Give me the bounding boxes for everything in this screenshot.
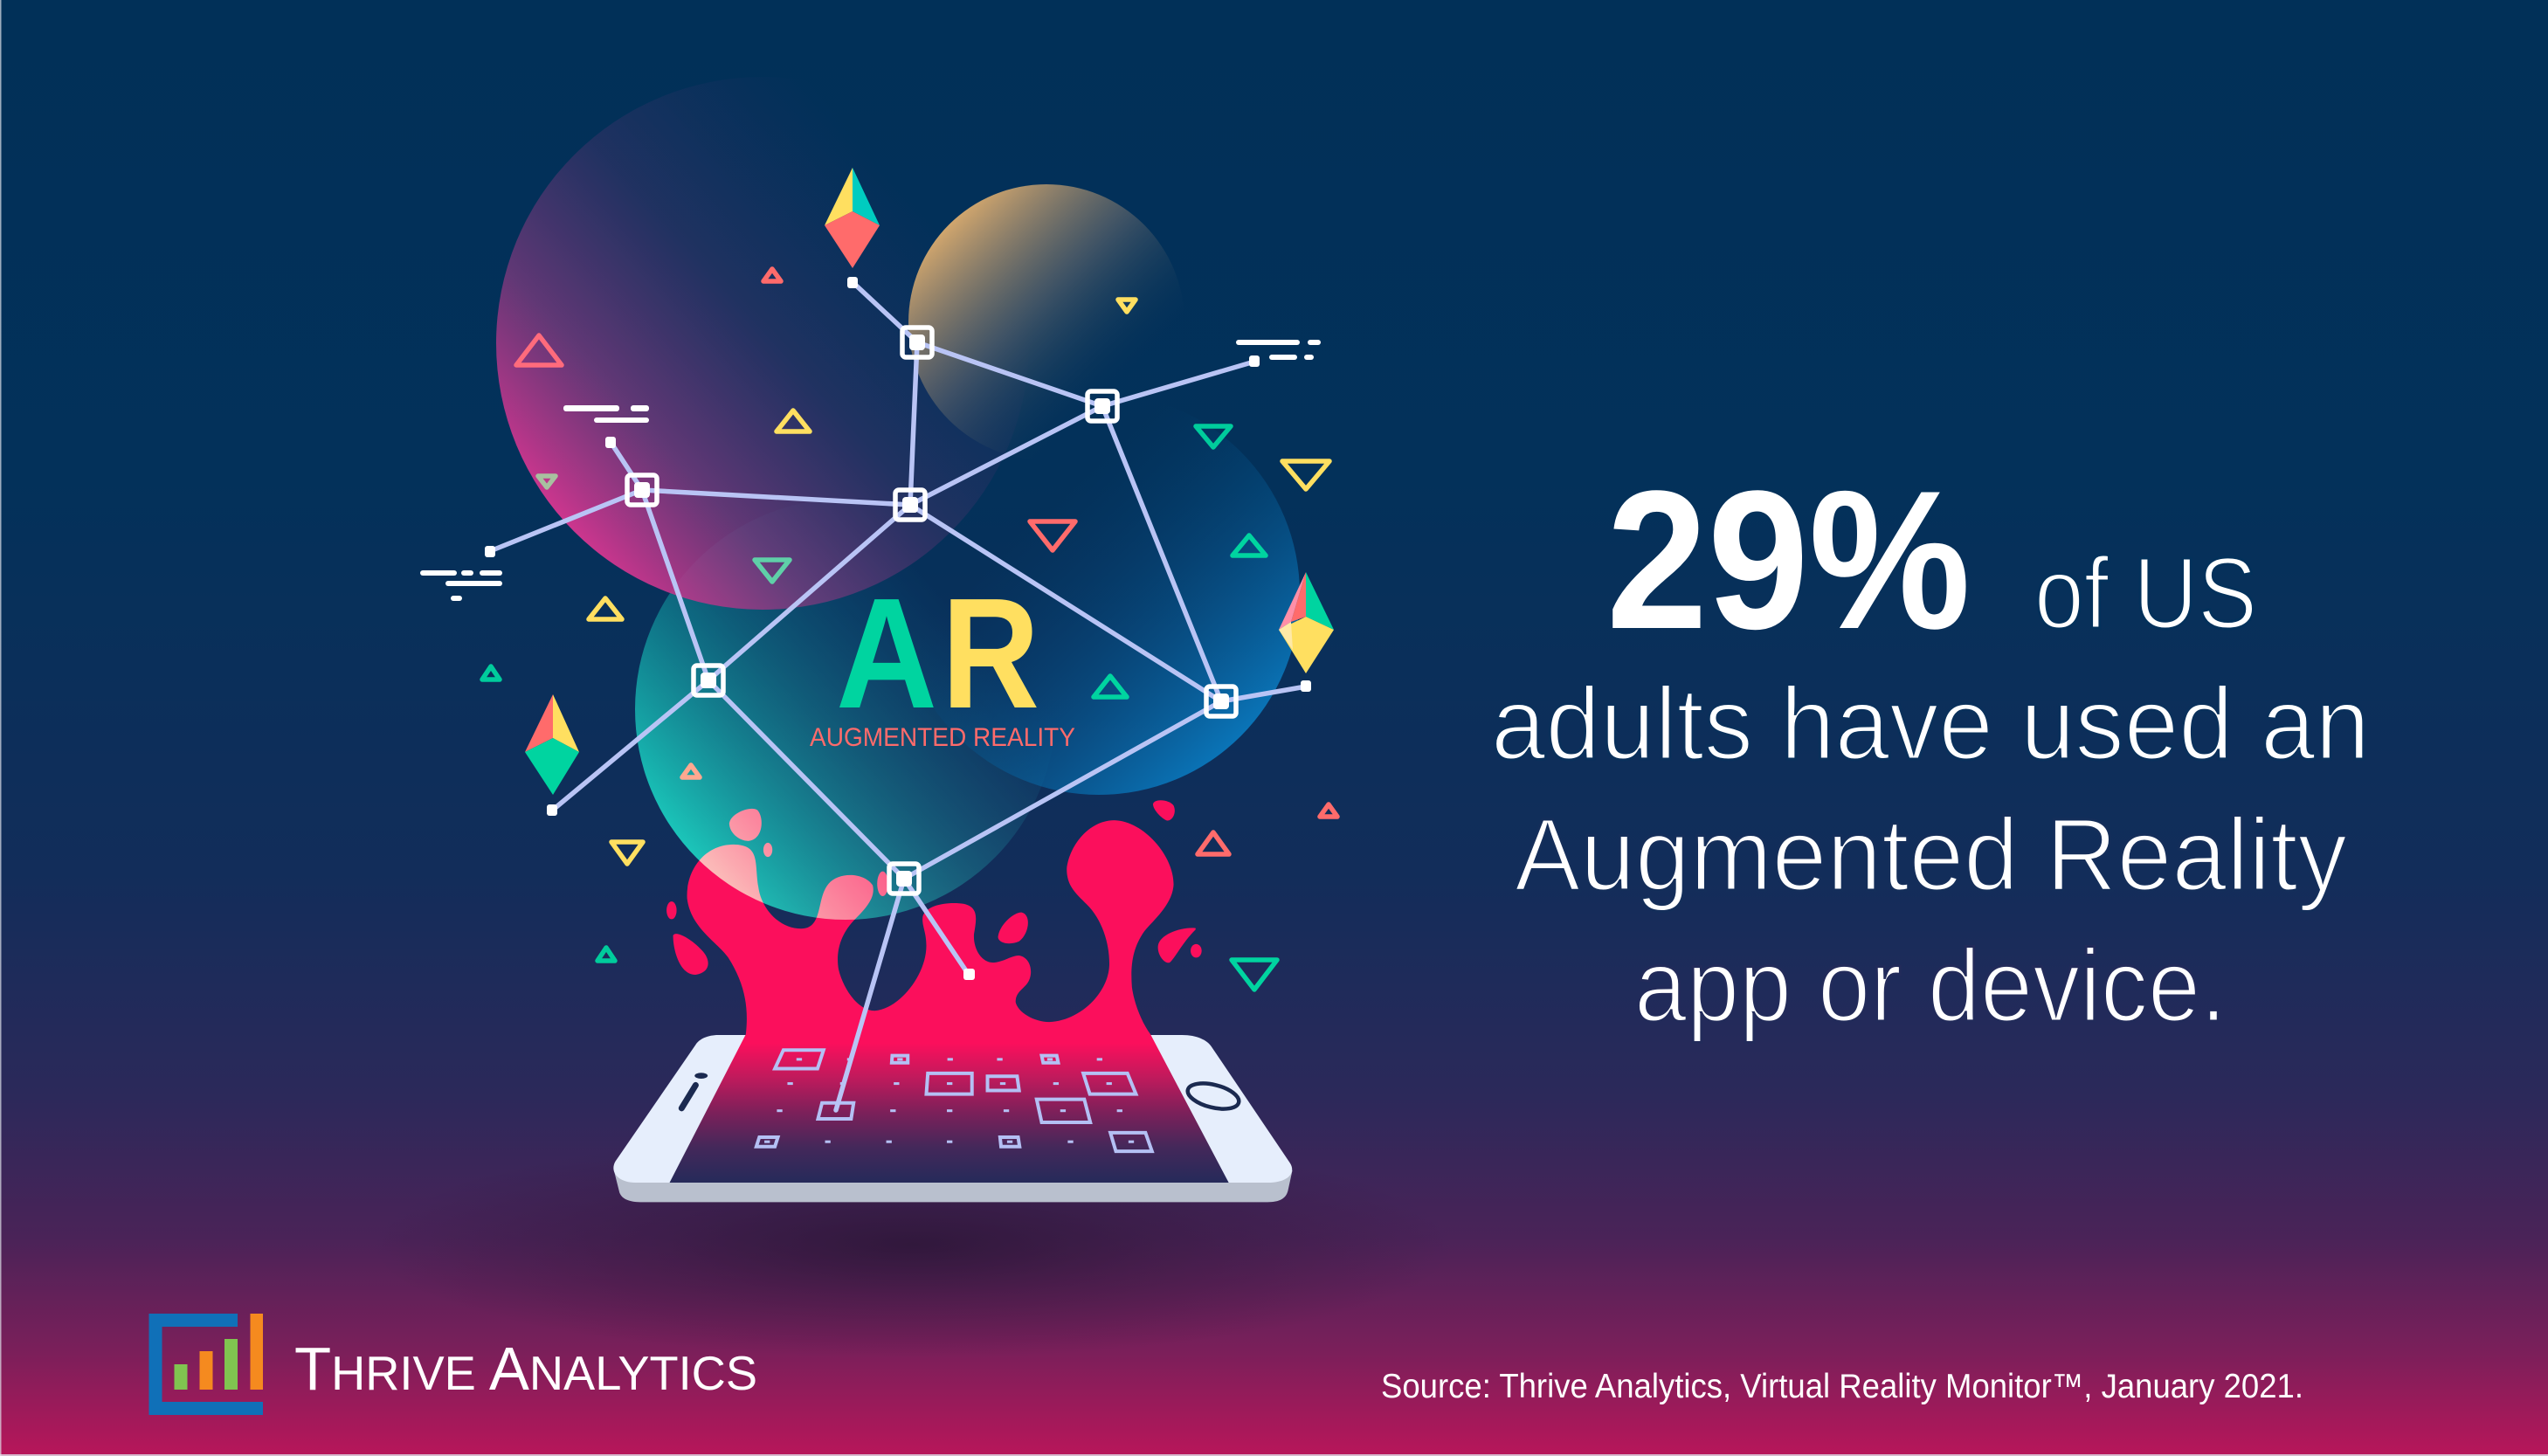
AR heading: R — [942, 566, 1039, 742]
headline text: app or device. — [1634, 928, 2227, 1044]
phone shadow — [371, 1131, 1454, 1358]
thin page edges — [0, 0, 2, 1456]
network nodes — [485, 277, 1311, 980]
AR heading: A — [836, 566, 937, 742]
headline statistic: 29% of US — [1606, 449, 2257, 670]
headline text — [1491, 666, 2370, 1044]
headline statistic: 29% of US: 29% — [1606, 449, 1971, 670]
phone speaker — [681, 1073, 708, 1108]
source note: Source: Thrive Analytics, Virtual Reality Monitor™, January 2021. — [1381, 1368, 2303, 1405]
phone home button — [1185, 1079, 1241, 1114]
gem: left — [525, 694, 579, 795]
AR subtitle: AUGMENTED REALITY — [810, 723, 1075, 752]
paint splash rising from screen — [666, 800, 1229, 1183]
pink sphere — [496, 77, 1029, 610]
teal sphere — [635, 499, 1056, 920]
AR heading — [836, 566, 1039, 742]
network lines — [490, 282, 1306, 1110]
headline statistic: 29% of US: of US — [2034, 536, 2257, 650]
text dashes: top right — [1236, 340, 1321, 360]
logo: Thrive Analytics — [148, 1314, 757, 1415]
tan sphere — [908, 184, 1184, 460]
blue sphere — [898, 393, 1300, 795]
floating triangles — [482, 269, 1337, 990]
headline text: Augmented Reality — [1515, 797, 2347, 913]
text dashes: far left — [420, 570, 502, 601]
logo wordmark: THRIVE ANALYTICS — [294, 1335, 757, 1403]
illustration: AR phone — [613, 1035, 1293, 1202]
gem: top — [825, 168, 880, 268]
logo mark — [148, 1314, 263, 1415]
gem: right — [1279, 572, 1334, 673]
text dashes: left — [563, 405, 649, 423]
phone body — [613, 1035, 1293, 1202]
screen grid of squares — [756, 1050, 1152, 1151]
headline text: adults have used an — [1491, 666, 2370, 782]
